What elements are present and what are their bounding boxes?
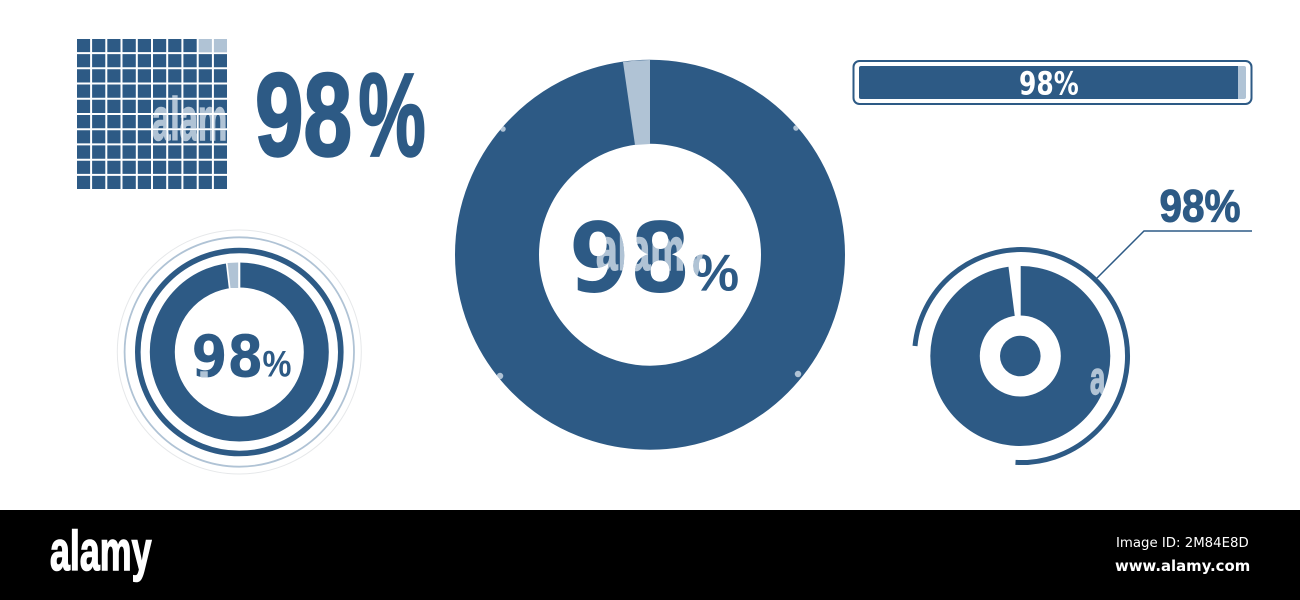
donut disc [930,266,1110,446]
donut label: 98 percent: % [262,344,291,385]
heading: large 98 percent [255,48,426,181]
footer logo: alamy [50,519,152,582]
callout label: 98 percent: 98% [1160,182,1241,232]
watermark overlays: alamy [152,87,246,154]
light ring [125,237,354,467]
footer band [0,510,1300,600]
website: www.alamy.com [1115,557,1250,575]
image id: Image ID: 2M84E8D [1116,536,1249,551]
panel: concentric ring donut [117,230,361,474]
donut label: 98 percent: 98 [192,323,263,390]
remaining 2 percent slice [228,262,238,288]
watermark overlays: alamy [596,215,707,283]
bar outline [854,61,1252,104]
donut ring [162,275,316,429]
donut ring [497,102,803,408]
panel: callout donut [915,182,1252,463]
slice gap [226,260,240,290]
panel: central donut chart [497,60,803,408]
bar fill [859,66,1238,99]
dark ring [138,250,341,454]
panel: progress bar [854,61,1252,104]
bar remainder [1230,66,1246,99]
heading: large 98 percent: 98 [255,49,352,181]
center dot [1000,336,1041,376]
watermark overlays [152,87,1106,405]
leader line [1097,231,1252,278]
panel: waffle grid with 98% [77,39,426,189]
remaining 2 percent slice [623,60,650,145]
white slice gap [1008,262,1021,318]
watermark overlays: a [1090,354,1106,405]
waffle chart: 10 by 10 squares [77,39,227,189]
white inner ring [980,316,1061,396]
faint outer ring [117,230,361,474]
donut label: 98 percent: % [692,244,739,302]
bar label: 98 percent: 98% [1019,65,1079,103]
outer arc [915,250,1128,463]
donut label: 98 percent: 98 [569,203,691,315]
heading: large 98 percent: % [358,48,426,181]
